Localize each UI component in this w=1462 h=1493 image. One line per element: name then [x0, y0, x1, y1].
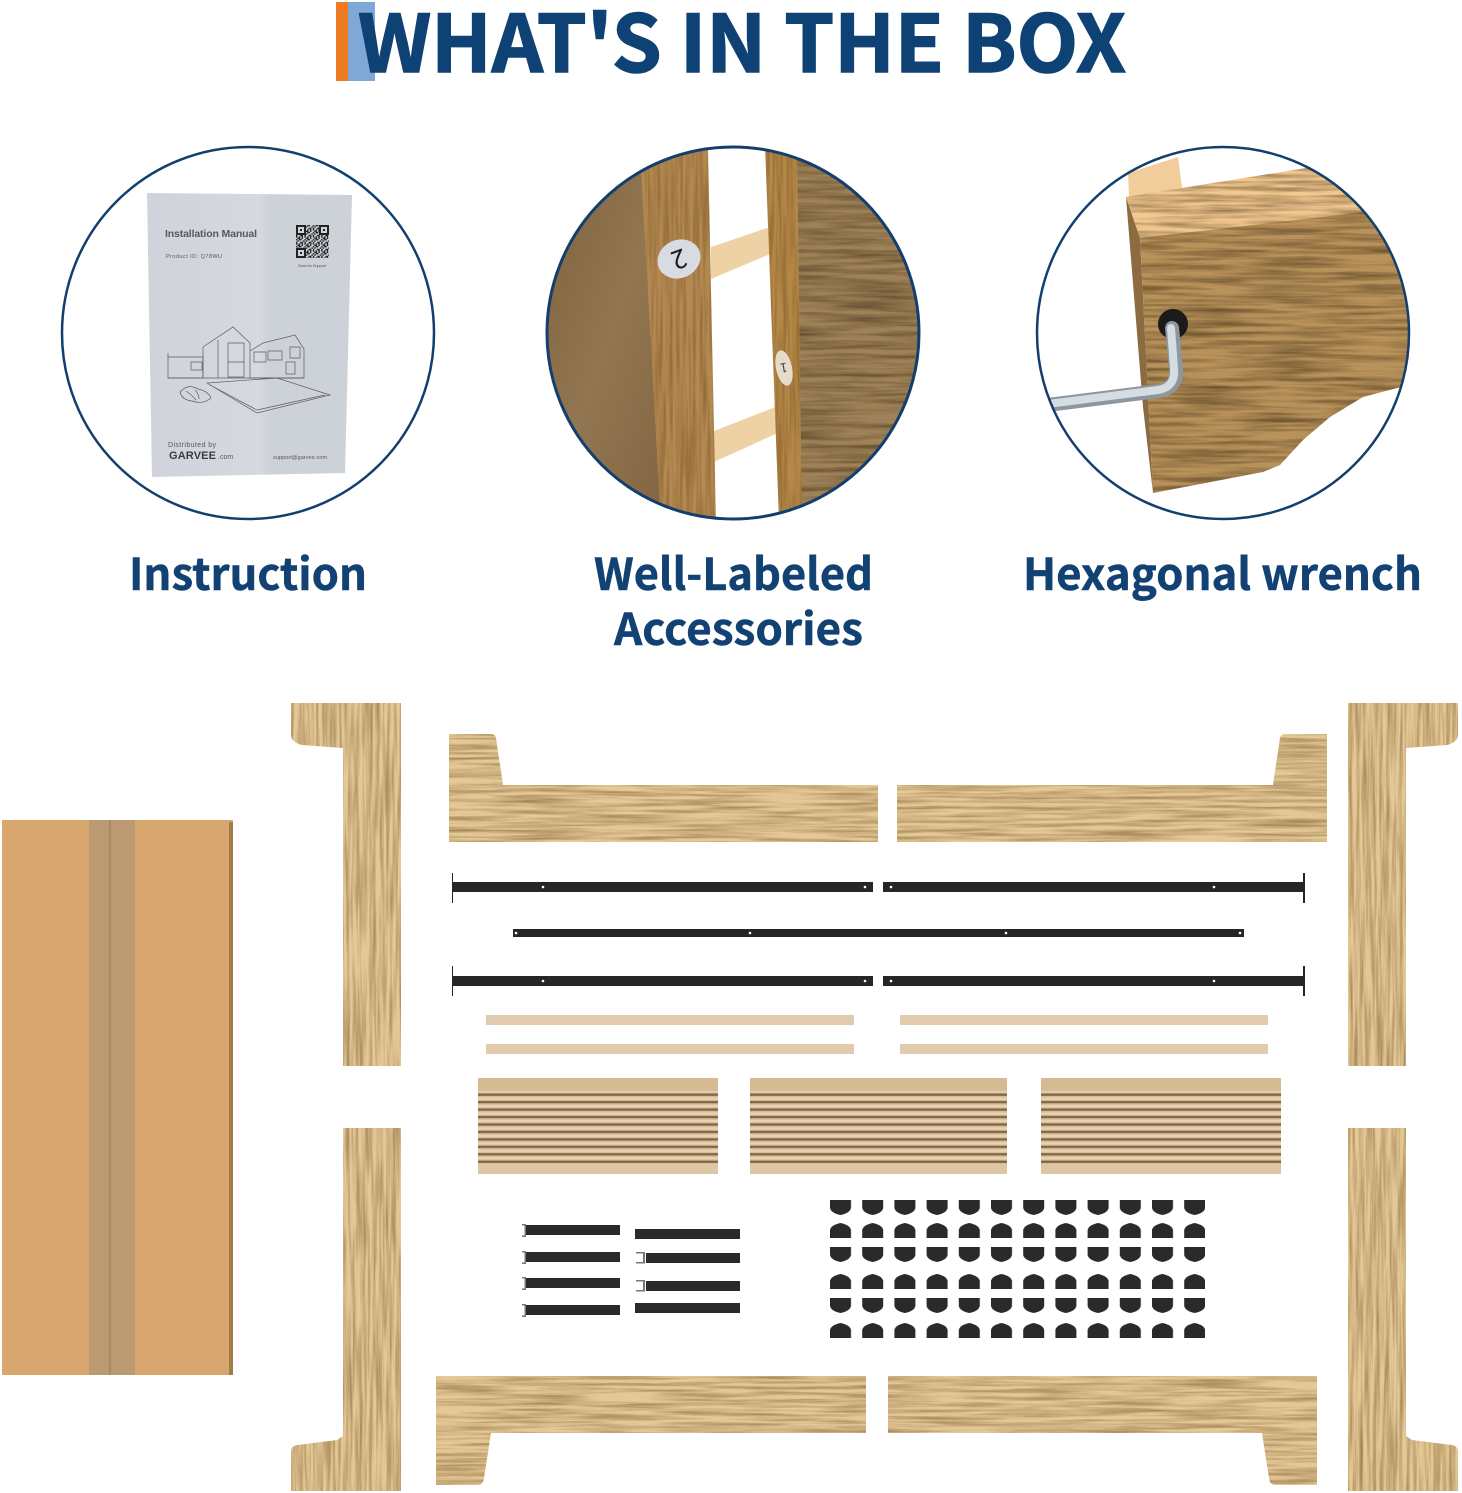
hex key — [1040, 328, 1176, 406]
bar row 2 — [513, 929, 1244, 937]
panel: instruction manual — [62, 147, 434, 519]
bar row 3 — [452, 966, 1305, 996]
top face of wood block — [1126, 168, 1363, 238]
upper dowel — [711, 228, 770, 279]
product id: Product ID: Q78WU — [166, 254, 222, 260]
packing tape — [89, 820, 135, 1375]
front face of wood block — [1140, 212, 1425, 493]
cardboard box — [2, 820, 233, 1375]
panel: well-labeled accessories — [540, 140, 925, 530]
label: well-labeled accessories: Accessories — [613, 594, 863, 658]
distributor line: Distributed by — [168, 442, 216, 449]
thin wood strips — [486, 1015, 1268, 1054]
left wood panel — [548, 172, 660, 502]
washer — [1158, 309, 1188, 339]
manual heading: Installation Manual — [165, 228, 257, 240]
title accent: light blue bar — [348, 2, 375, 81]
black clips grid — [830, 1200, 1205, 1338]
slat panel: right — [1041, 1078, 1281, 1174]
upright stick — [1128, 157, 1183, 197]
rear rail — [765, 145, 802, 520]
sticker number 1: 1 — [779, 359, 789, 378]
short brackets: left column — [522, 1224, 620, 1317]
panel: hexagonal wrench — [1037, 147, 1425, 519]
brand suffix: .com — [218, 454, 233, 461]
circle outline — [1037, 147, 1409, 519]
wood post: top right — [1348, 703, 1458, 1066]
lower dowel — [714, 407, 776, 462]
brand: GARVEE — [169, 450, 216, 462]
short brackets: right column — [635, 1229, 740, 1313]
support email: support@garvee.com — [273, 455, 327, 461]
wrench photo — [1040, 150, 1425, 493]
sticker number 1 — [775, 350, 793, 386]
sticker number 2: 2 — [666, 241, 693, 280]
QR code — [296, 225, 329, 258]
label: instruction: Instruction — [129, 539, 367, 603]
sticker number 2 — [658, 239, 700, 279]
top rail: left — [449, 734, 878, 842]
side edge of wood block — [1126, 197, 1153, 493]
metal bars — [452, 873, 1305, 996]
white gap — [708, 145, 780, 525]
photo of labeled rails — [540, 140, 925, 530]
right wood panel — [797, 160, 918, 504]
title accent: orange bar — [336, 2, 348, 81]
title — [336, 0, 1126, 95]
top rail: right — [897, 734, 1327, 842]
slat panel: middle — [750, 1078, 1007, 1174]
slat panel: left — [478, 1078, 718, 1174]
wood post: bottom left — [291, 1128, 401, 1491]
bottom rail: left — [436, 1376, 866, 1485]
wood post: top left — [291, 703, 401, 1066]
house line drawing — [168, 327, 330, 413]
wood post: bottom right — [1348, 1128, 1458, 1491]
circle outline — [547, 147, 919, 519]
label: well-labeled accessories: Well-Labeled — [594, 539, 873, 603]
bar row 1 — [452, 873, 1305, 903]
circle outline — [62, 147, 434, 519]
front rail — [640, 150, 716, 525]
QR caption: Scan for Support — [298, 263, 327, 268]
bottom rail: right — [888, 1376, 1317, 1485]
manual booklet — [147, 193, 352, 477]
label: hexagonal wrench: Hexagonal wrench — [1023, 539, 1422, 603]
